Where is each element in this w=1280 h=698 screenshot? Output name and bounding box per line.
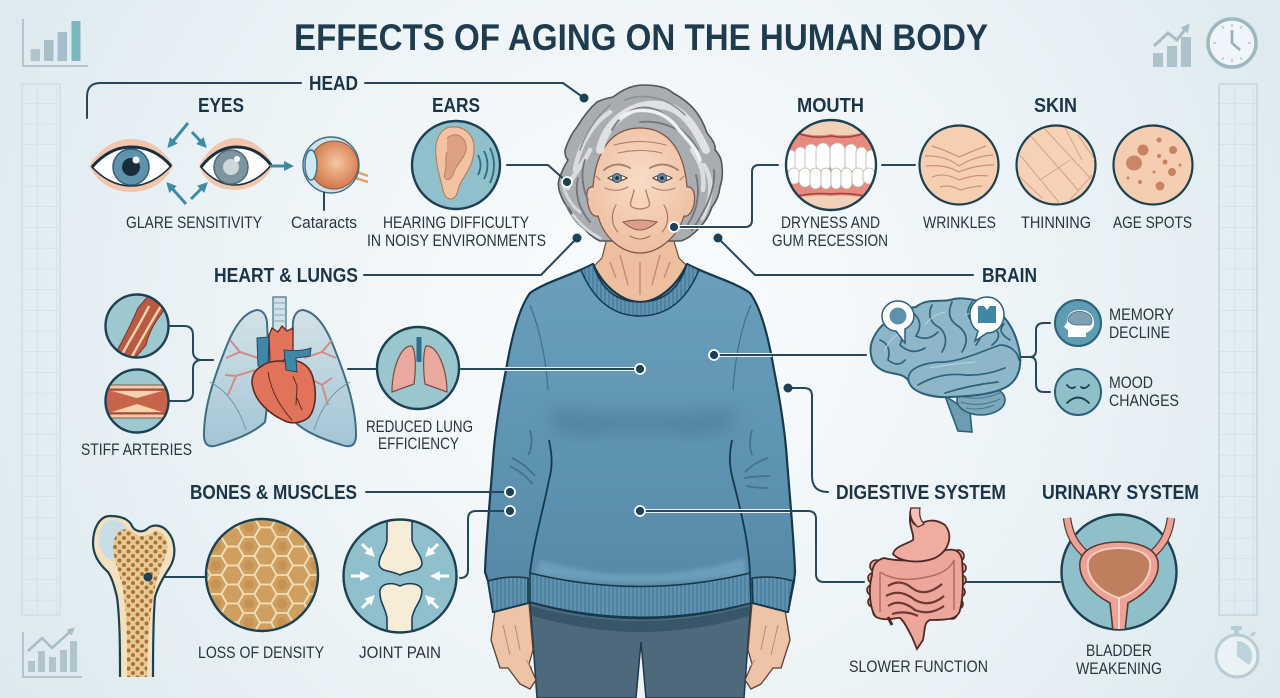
connector: mouth to skin: [882, 164, 915, 166]
icon: stomach and intestines: [867, 508, 966, 649]
title: EFFECTS OF AGING ON THE HUMAN BODY: [294, 17, 988, 58]
hair back: [558, 85, 722, 241]
connector halo: lungs to chest: [505, 367, 640, 371]
inner arm outlines: [530, 440, 750, 573]
label: gum recession: GUM RECESSION: [772, 231, 888, 250]
label: decline: DECLINE: [1109, 323, 1170, 342]
icon: femur: [93, 516, 174, 677]
trouser shading: [531, 606, 750, 632]
heart: [257, 337, 269, 368]
icon: memory decline: [1055, 300, 1101, 346]
face: [587, 128, 695, 253]
sweater: [485, 264, 795, 618]
connector line: brain dark: [714, 354, 866, 356]
icon: wrinkles: [920, 126, 998, 204]
panel: ears: [367, 95, 546, 250]
panel: skin: [920, 95, 1192, 232]
connector line: digestive dark: [640, 511, 1060, 582]
icon: bar chart top left: [23, 19, 88, 66]
panel: heart and lungs: [81, 294, 473, 459]
label: wrinkles: WRINKLES: [923, 213, 996, 232]
icon: growth chart bottom left: [23, 630, 82, 677]
icon: bladder: [1062, 514, 1176, 631]
label: slower function: SLOWER FUNCTION: [849, 657, 988, 676]
connectors and section headings: [87, 73, 1060, 582]
connector: brain brace: [1021, 323, 1050, 392]
sweater shading: [510, 305, 770, 583]
connector halo: digestive: [640, 509, 790, 513]
heading: urinary system: URINARY SYSTEM: [1042, 482, 1199, 504]
connector: urinary top: [788, 388, 828, 492]
heading: mouth: MOUTH: [797, 95, 864, 117]
icon: healthy eye: [89, 139, 173, 192]
panel: digestive system: [836, 482, 1006, 676]
label: changes: CHANGES: [1109, 391, 1179, 410]
icon: brain: [871, 297, 1020, 432]
connector: head: [87, 83, 584, 118]
label: thinning: THINNING: [1021, 213, 1091, 232]
heading: ears: EARS: [432, 95, 480, 117]
hands: [491, 603, 790, 689]
heading: bones and muscles: BONES & MUSCLES: [190, 482, 357, 504]
icon: ear: [412, 121, 500, 209]
icon: clock: [1208, 19, 1256, 67]
connector line: lungs dark: [348, 368, 640, 370]
label: noisy environments: IN NOISY ENVIRONMENTS: [367, 231, 546, 250]
icon: bone density honeycomb: [206, 519, 318, 631]
dots: anchor points: [505, 94, 792, 516]
icon: age spots: [1114, 126, 1192, 204]
trousers: [530, 600, 751, 698]
icon: teeth and gums: [786, 120, 876, 210]
label: loss of density: LOSS OF DENSITY: [198, 643, 324, 662]
heading: skin: SKIN: [1034, 95, 1077, 117]
panel: bones and muscles: [93, 482, 456, 677]
label: glare sensitivity: GLARE SENSITIVITY: [126, 213, 262, 232]
icon: lungs and heart: [204, 297, 356, 446]
connector halo: brain to chest: [714, 353, 772, 357]
label: reduced lung: REDUCED LUNG: [366, 417, 473, 436]
heading: heart and lungs: HEART & LUNGS: [214, 265, 358, 287]
panel: mouth: [772, 95, 888, 250]
panel: urinary system: [1042, 482, 1199, 678]
neck: [590, 238, 691, 304]
right decorative grid: [1219, 84, 1257, 615]
label: age spots: AGE SPOTS: [1113, 213, 1192, 232]
heading: eyes: EYES: [198, 95, 244, 117]
icon: damaged artery: [106, 294, 170, 364]
connector: heart and lungs: [364, 238, 577, 275]
label: weakening: WEAKENING: [1076, 659, 1162, 678]
icon: mood changes: [1055, 369, 1101, 415]
left decorative grid: [22, 84, 60, 615]
icon: joint pain: [344, 515, 456, 640]
hair strands: [563, 96, 714, 238]
label: mood: MOOD: [1109, 373, 1153, 392]
heading: head: HEAD: [309, 73, 358, 95]
figure: older woman: [485, 85, 795, 698]
icon: glare arrows: [169, 123, 290, 204]
label: efficiency: EFFICIENCY: [378, 434, 459, 453]
icon: eyeball cataract: [303, 137, 368, 210]
icon: reduced lung circle: [377, 327, 459, 409]
panel: brain: [871, 297, 1179, 432]
icon: growth chart top right: [1153, 27, 1191, 67]
icon: thinning skin: [1016, 126, 1096, 206]
collar: [581, 264, 699, 316]
connector: joint: [460, 511, 510, 578]
label: bladder: BLADDER: [1086, 641, 1152, 660]
label: dryness and: DRYNESS AND: [781, 213, 880, 232]
label: stiff arteries: STIFF ARTERIES: [81, 440, 192, 459]
icon: brain bubble one: [882, 301, 914, 343]
icon: cloudy eye: [199, 138, 273, 190]
icon: bubble book: [978, 306, 996, 323]
facial features: [596, 142, 684, 239]
connector: ears to head: [507, 165, 567, 182]
panel: eyes: [89, 95, 368, 232]
label: cataracts: Cataracts: [291, 213, 357, 232]
icon: narrowed artery: [105, 370, 169, 432]
connector: artery brace: [169, 326, 213, 401]
icon: brain bubble two: [970, 297, 1004, 341]
icon: stopwatch: [1216, 626, 1258, 677]
icon: bubble mini brain: [890, 308, 906, 324]
label: memory: MEMORY: [1109, 305, 1174, 324]
connector: bones: [366, 491, 510, 493]
connector line: mouth dark: [674, 165, 778, 227]
connector: brain: [718, 238, 973, 275]
heading: brain: BRAIN: [982, 265, 1037, 287]
connector halo: mouth: [674, 225, 745, 229]
label: hearing difficulty: HEARING DIFFICULTY: [383, 213, 529, 232]
sweater hem and cuffs: [488, 573, 793, 617]
label: joint pain: JOINT PAIN: [359, 643, 441, 662]
connector: bone to density: [148, 576, 205, 578]
heading: digestive system: DIGESTIVE SYSTEM: [836, 482, 1006, 504]
